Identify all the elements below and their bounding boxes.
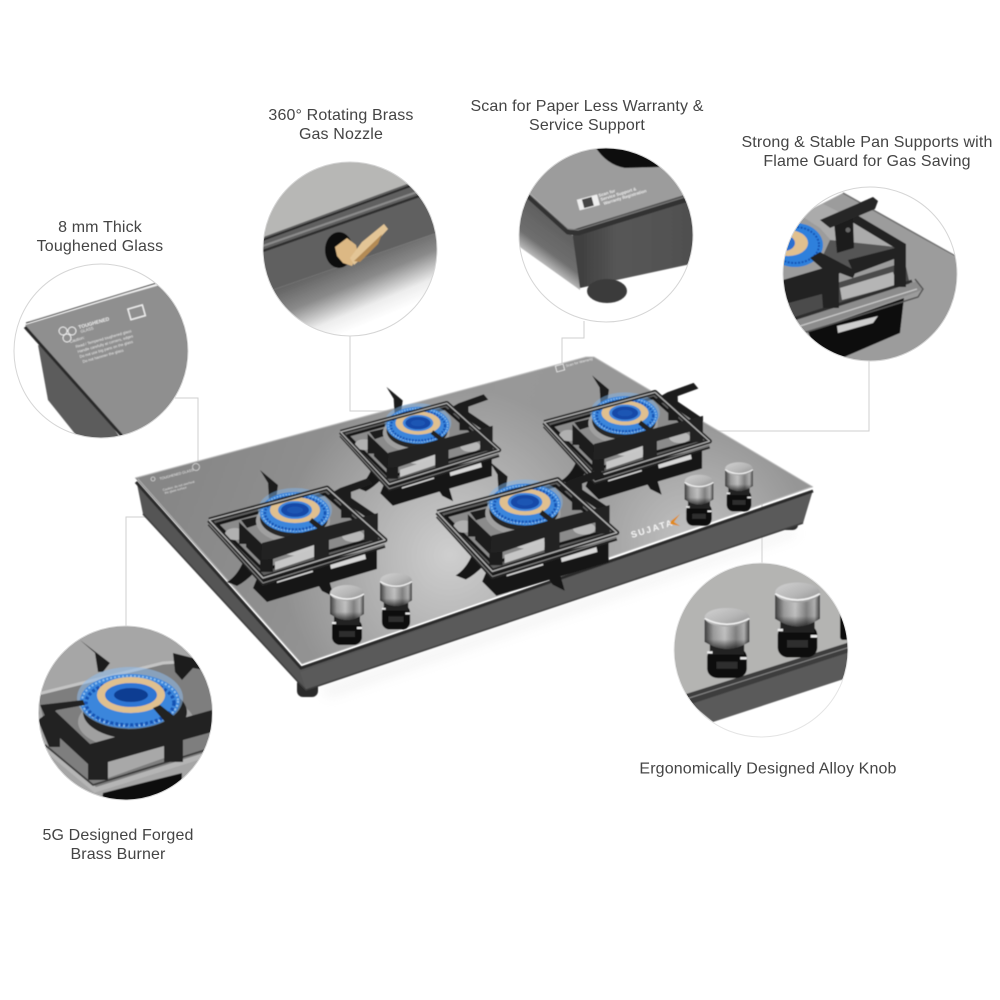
- zoom circle: Scan for: [598, 188, 616, 198]
- printed labels: the glass surface: [164, 485, 187, 495]
- zoom circle: GLASS: [80, 325, 94, 334]
- callout: pan supports: [742, 134, 992, 370]
- zoom circle: Warranty Registration: [603, 188, 647, 206]
- heading: Flame Guard for Gas Saving: [763, 153, 971, 170]
- leader lines: [126, 321, 869, 628]
- printed labels: [151, 357, 594, 495]
- zoom circle: [262, 162, 438, 336]
- zoom circle: [518, 148, 694, 322]
- heading: Ergonomically Designed Alloy Knob: [639, 760, 897, 778]
- glass top: [135, 357, 813, 664]
- zoom circle: TOUGHENED: [78, 316, 111, 331]
- heading: Toughened Glass: [37, 238, 163, 255]
- knobs: [330, 462, 753, 645]
- callout: 8 mm thick toughened glass: [14, 219, 200, 442]
- callout: alloy knob: [639, 560, 897, 778]
- zoom circle: Service Support &: [600, 186, 637, 202]
- printed labels: Caution: do not overheat: [162, 480, 195, 492]
- brand: SUJATA: [630, 517, 675, 540]
- zoom circle: [670, 560, 850, 737]
- heading: Scan for Paper Less Warranty &: [470, 98, 704, 115]
- burner: front centre: [437, 461, 617, 596]
- zoom circle: Caution:: [69, 335, 85, 344]
- heading: 8 mm Thick: [58, 219, 143, 236]
- zoom circle: Do not hammer the glass: [82, 348, 124, 364]
- zoom circle: Do not use big pans on the glass: [79, 340, 134, 359]
- heading: 5G Designed Forged: [42, 827, 194, 844]
- burner: rear right: [544, 375, 710, 499]
- heading: 360° Rotating Brass: [268, 107, 414, 124]
- printed labels: TOUGHENED GLASS: [159, 468, 195, 481]
- zoom circle: Read / Tempered toughened glass: [75, 329, 132, 349]
- hob appliance: [135, 357, 813, 697]
- callout: warranty scan: [470, 98, 704, 322]
- burner: rear centre: [341, 387, 499, 506]
- side walls: [137, 484, 813, 690]
- burner: front left: [209, 470, 385, 602]
- printed labels: Scan for Warranty: [565, 357, 594, 368]
- heading: Gas Nozzle: [299, 126, 383, 143]
- callout: rotating brass nozzle: [262, 108, 438, 336]
- heading: Service Support: [529, 117, 645, 134]
- zoom circle: [14, 264, 200, 442]
- heading: Brass Burner: [70, 846, 166, 863]
- heading: Strong & Stable Pan Supports with: [742, 134, 992, 151]
- zoom circle: [782, 186, 958, 362]
- zoom circle: [38, 626, 213, 800]
- zoom circle: Handle carefully at corners, edges: [77, 334, 134, 354]
- ground shadow: [320, 530, 798, 696]
- callout: forged brass burner: [38, 626, 213, 859]
- feet: [297, 678, 318, 697]
